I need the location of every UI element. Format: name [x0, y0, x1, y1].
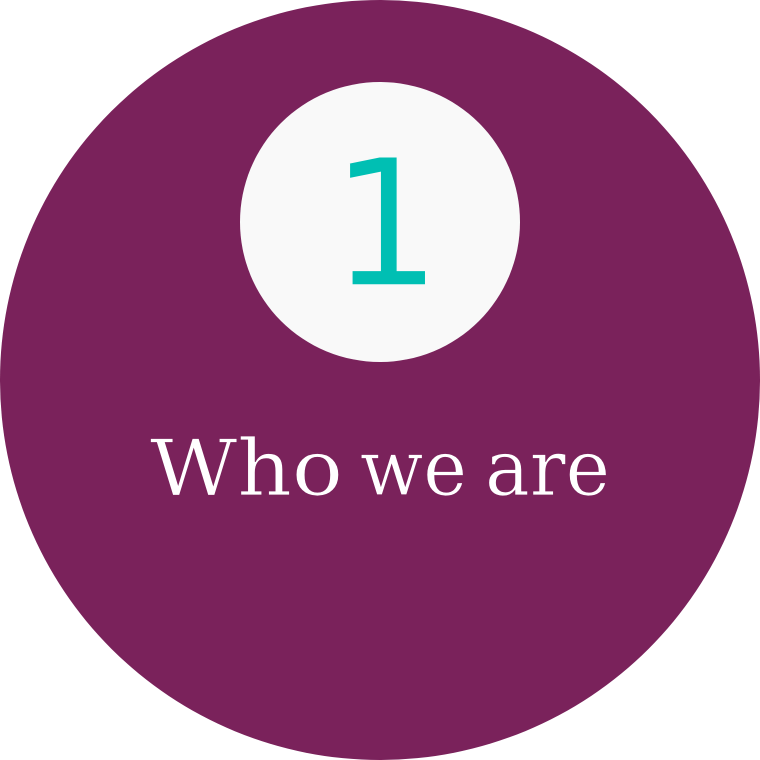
heading — [150, 424, 610, 514]
heading: we — [360, 424, 467, 514]
heading: are — [485, 424, 610, 514]
panel: white number circle — [240, 82, 520, 362]
heading: Who — [150, 424, 343, 514]
number 1: 1 — [330, 122, 442, 327]
